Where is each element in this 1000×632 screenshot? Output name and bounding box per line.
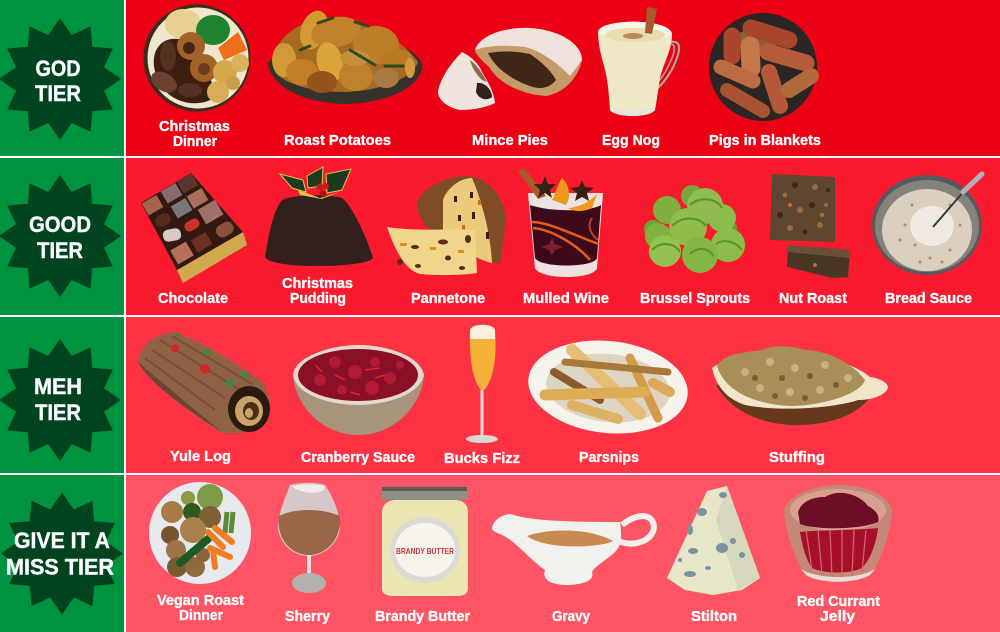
god tier badge: TIER [35, 81, 81, 106]
item: bread sauce [872, 174, 982, 307]
label: Egg Nog [602, 132, 660, 149]
label [282, 275, 353, 307]
label: Pudding [290, 290, 346, 307]
item: chocolate [141, 173, 247, 307]
god tier background [0, 0, 1000, 156]
label: Brandy Butter [375, 608, 470, 625]
god tier badge [0, 18, 121, 140]
label: Dinner [179, 607, 223, 624]
item: brandy butter [375, 487, 470, 625]
label: Brussel Sprouts [640, 290, 750, 307]
meh tier background [0, 317, 1000, 473]
item: stuffing [712, 346, 888, 466]
god tier badge: GOD [36, 56, 80, 81]
meh tier badge: MEH [34, 374, 82, 399]
item: egg nog [598, 7, 679, 149]
item: bucks fizz [444, 325, 520, 467]
label: Parsnips [579, 449, 639, 466]
icon: champagne flute of bucks fizz [466, 325, 498, 443]
row: good tier [0, 158, 1000, 315]
label [797, 593, 880, 625]
item: stilton [667, 486, 760, 625]
good tier badge: GOOD [29, 212, 91, 237]
give it a miss tier background [0, 475, 1000, 632]
icon: panettone slices [387, 176, 506, 275]
label [159, 118, 230, 150]
good tier badge: TIER [37, 238, 83, 263]
give it a miss tier badge [1, 492, 123, 614]
icon: bowl of bread sauce [872, 174, 982, 275]
label: Bucks Fizz [444, 450, 520, 467]
label: Stuffing [769, 449, 825, 466]
icon: dish of stuffing [712, 346, 888, 425]
icon: christmas pudding with holly [265, 167, 373, 266]
row: meh tier [0, 317, 1000, 473]
icon: wedge of stilton [667, 486, 760, 595]
label [157, 592, 244, 624]
label: Pigs in Blankets [709, 132, 821, 149]
icon: glass dish of red currant jelly [784, 485, 892, 582]
item: red currant jelly [784, 485, 892, 625]
icon: yule log [138, 332, 270, 433]
label: Stilton [691, 608, 737, 625]
item: sherry [278, 483, 340, 625]
icon: brussel sprouts [644, 185, 745, 273]
item: cranberry sauce [293, 345, 424, 466]
label: Chocolate [158, 290, 228, 307]
icon: roast parsnips on a plate [524, 333, 692, 441]
item: brussel sprouts [640, 185, 750, 307]
label: Nut Roast [779, 290, 847, 307]
label: Mulled Wine [523, 290, 609, 307]
good tier background [0, 158, 1000, 315]
item: gravy [492, 514, 654, 625]
icon: jar of brandy butter: BRANDY BUTTER [396, 546, 454, 556]
label: Christmas [282, 275, 353, 292]
row: give it a miss tier [0, 475, 1000, 632]
icon: vegan roast dinner plate [149, 482, 251, 584]
icon: gravy boat [492, 514, 654, 585]
icon: pigs in blankets on a black plate [709, 13, 817, 121]
give it a miss tier badge: MISS TIER [6, 554, 114, 580]
label: Pannetone [411, 290, 485, 307]
item: yule log [138, 332, 270, 465]
label: Sherry [285, 608, 331, 625]
item: parsnips [524, 333, 692, 466]
good tier badge [0, 175, 121, 297]
icon: box of chocolates [141, 173, 247, 283]
item: pannetone [387, 176, 506, 307]
label: Yule Log [170, 448, 231, 465]
item: roast potatoes [268, 7, 423, 149]
item: vegan roast dinner [149, 482, 251, 624]
item: christmas dinner [144, 4, 250, 150]
icon: roast dinner plate [144, 4, 250, 112]
row: god tier [0, 0, 1000, 156]
item: mince pies [438, 28, 582, 149]
label: Jelly [820, 608, 856, 625]
item: pigs in blankets [709, 13, 821, 149]
icon: bowl of cranberry sauce [293, 345, 424, 435]
label: Red Currant [797, 593, 880, 610]
icon: mince pie and broken piece [438, 28, 582, 110]
label: Bread Sauce [885, 290, 972, 307]
meh tier badge [0, 339, 121, 461]
meh tier badge: TIER [35, 400, 81, 425]
label: Vegan Roast [157, 592, 244, 609]
label: Mince Pies [472, 132, 548, 149]
item: christmas pudding [265, 167, 373, 307]
icon: glass of mulled wine [518, 168, 603, 277]
label: Roast Potatoes [284, 132, 391, 149]
icon: sherry glass [278, 483, 340, 593]
label: Christmas [159, 118, 230, 135]
label: Gravy [552, 608, 591, 625]
label: Cranberry Sauce [301, 449, 415, 466]
icon: roast potatoes on a plate [268, 7, 423, 104]
item: nut roast [770, 174, 850, 307]
give it a miss tier badge: GIVE IT A [14, 528, 110, 553]
icon: nut roast slices [770, 174, 850, 278]
icon: glass of egg nog [598, 7, 679, 116]
item: mulled wine [518, 168, 609, 307]
label: Dinner [173, 133, 217, 150]
